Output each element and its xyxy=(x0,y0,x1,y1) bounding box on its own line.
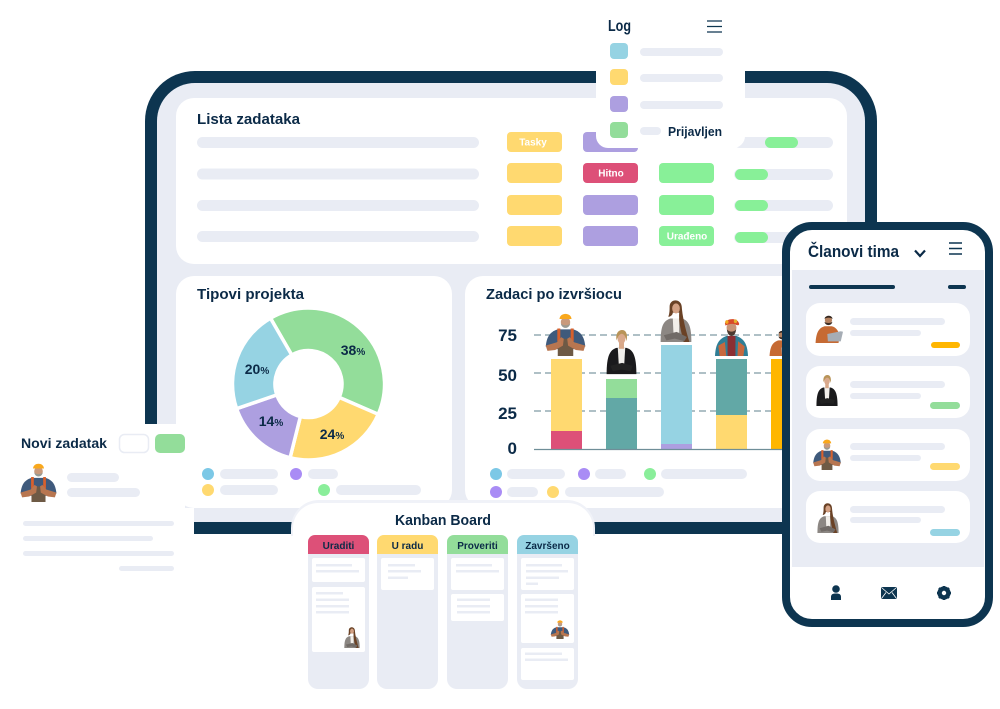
tablet frame xyxy=(145,71,877,534)
bar 3 xyxy=(661,345,692,449)
column: in progress xyxy=(377,535,438,689)
bar 4 xyxy=(716,359,747,449)
panel: log xyxy=(596,0,745,148)
person: woman with long hair xyxy=(344,627,360,648)
member card 3 xyxy=(806,429,970,481)
icon: chevron xyxy=(915,250,925,256)
task row 3 xyxy=(197,195,833,215)
person: man in orange hoodie xyxy=(770,331,797,356)
form lines xyxy=(23,473,174,571)
donut labels xyxy=(245,342,365,442)
person: worker xyxy=(551,620,569,639)
person: man in colourful jacket xyxy=(715,319,748,356)
panel: task list xyxy=(176,98,847,264)
heading: project types: Tipovi projekta xyxy=(197,286,305,303)
person: woman in black blazer xyxy=(607,330,636,374)
person: worker xyxy=(21,464,56,502)
log entries xyxy=(610,43,723,138)
y axis labels: 75 xyxy=(498,326,517,345)
bar 1 xyxy=(551,359,582,449)
person: worker xyxy=(546,314,585,356)
button: confirm xyxy=(155,434,185,453)
panel: kanban board xyxy=(291,500,595,709)
icon: mail xyxy=(881,587,897,599)
bar 5 xyxy=(771,359,802,449)
button: cancel xyxy=(120,434,148,452)
icon: profile xyxy=(831,585,841,600)
chart legend xyxy=(490,468,747,498)
y axis labels: 50 xyxy=(498,366,517,385)
panel: tasks per assignee xyxy=(465,276,810,508)
heading: task list: Lista zadataka xyxy=(197,111,301,128)
donut chart xyxy=(232,308,384,460)
heading: new task: Novi zadatak xyxy=(21,435,107,451)
task row 2: Hitno xyxy=(598,168,624,180)
column: done xyxy=(517,535,578,689)
y axis labels: 25 xyxy=(498,404,517,423)
heading: log: Log xyxy=(608,18,631,35)
heading: kanban board: Kanban Board xyxy=(395,513,491,529)
panel: project types xyxy=(176,276,452,508)
member card 2 xyxy=(806,366,970,418)
member card 1 xyxy=(806,303,970,356)
column: to do: Uraditi xyxy=(323,541,355,552)
bar chart xyxy=(534,335,802,450)
task row 4: Urađeno xyxy=(667,232,707,242)
label: logged in: Prijavljen xyxy=(668,124,722,139)
person: woman with long hair xyxy=(661,300,691,342)
column: review xyxy=(447,535,508,689)
y axis labels: 0 xyxy=(508,439,517,458)
heading: tasks per assignee: Zadaci po izvršiocu xyxy=(486,286,622,303)
donut labels: 20% xyxy=(245,361,269,377)
donut legend xyxy=(202,468,421,496)
icon: menu xyxy=(949,243,962,254)
task row 4 xyxy=(197,226,833,246)
y axis labels xyxy=(498,326,517,458)
panel: new task xyxy=(0,424,194,580)
donut labels: 14% xyxy=(259,413,283,429)
task row 2 xyxy=(197,163,833,183)
member card 4 xyxy=(806,491,970,543)
column: in progress: U radu xyxy=(392,541,423,552)
donut labels: 38% xyxy=(341,342,365,358)
phone content area xyxy=(792,270,984,567)
column: review: Proveriti xyxy=(457,541,498,552)
bar 2 xyxy=(606,379,637,449)
column: to do xyxy=(308,535,369,689)
task row 1: Tasky xyxy=(519,138,547,148)
icon: settings xyxy=(937,586,951,600)
heading: team members: Članovi tima xyxy=(808,242,900,261)
task row 1 xyxy=(197,132,833,152)
icon: menu xyxy=(707,21,722,32)
column: done: Završeno xyxy=(525,541,570,552)
phone: team members xyxy=(786,226,989,623)
donut labels: 24% xyxy=(320,426,344,442)
